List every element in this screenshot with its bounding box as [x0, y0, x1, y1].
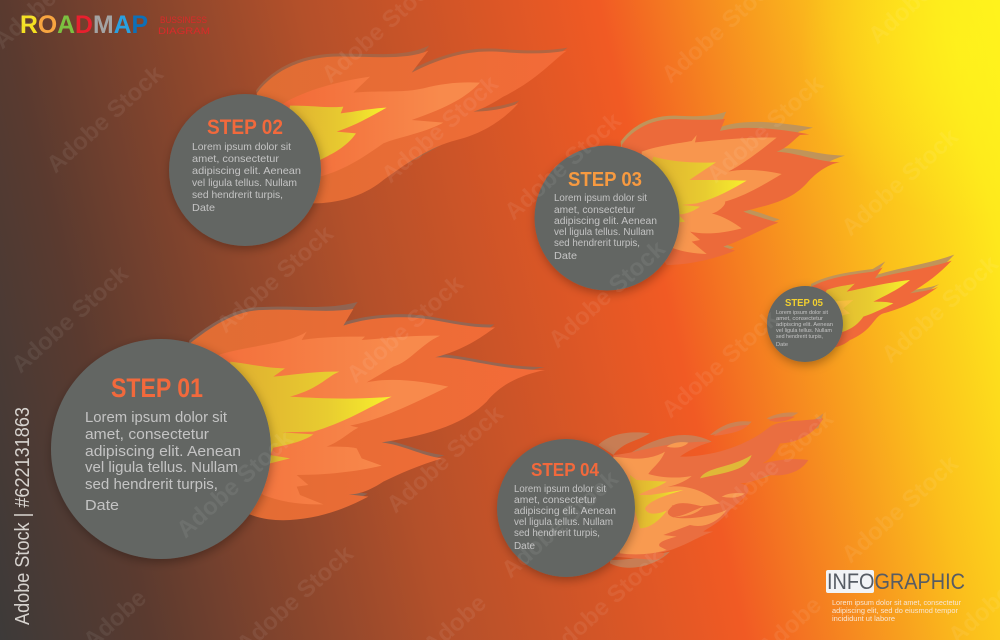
text block: step 3 body: adipiscing elit. Aenean — [554, 216, 657, 227]
flame: step 3 — [621, 112, 845, 265]
text block: step 2 body: adipiscing elit. Aenean — [192, 165, 301, 177]
flame: step 4 — [598, 412, 823, 568]
infographic label: INFOGRAPHIC — [827, 569, 965, 594]
text block: step 5 body — [776, 310, 833, 348]
panel: step 1 — [51, 339, 271, 559]
text block: step 2 body: sed hendrerit turpis, — [192, 189, 283, 201]
text block: step 2 body: Date — [192, 202, 215, 214]
text block: step 1 body: Date — [85, 497, 119, 514]
watermark: adobe stock pattern: Adobe Stock — [499, 107, 627, 226]
text block: step 1 body: vel ligula tellus. Nullam — [85, 459, 238, 476]
text block: step 2 body: vel ligula tellus. Nullam — [192, 177, 297, 189]
panel: step 3 — [534, 146, 680, 290]
text block: step 1 body: sed hendrerit turpis, — [85, 476, 218, 493]
text block: step 1 body: amet, consectetur — [85, 426, 209, 443]
watermark: adobe stock pattern: Adobe Stock — [6, 260, 134, 379]
text block: step 5 body: amet, consectetur — [776, 316, 823, 322]
text block: step 3 body: Date — [554, 251, 577, 262]
panel: step 2 — [169, 94, 321, 246]
watermark: adobe stock pattern: Adobe Stock — [41, 60, 169, 179]
text block: step 3 body: Lorem ipsum dolor sit — [554, 193, 647, 204]
text block: step 5 body: Lorem ipsum dolor sit — [776, 310, 828, 316]
panel: step 5 — [767, 286, 843, 362]
watermark: adobe stock pattern: Adobe Stock — [376, 70, 504, 189]
text block: step 1 body — [85, 409, 241, 514]
watermark: adobe stock pattern: Adobe Stock — [211, 220, 339, 339]
flame: step 1 — [179, 302, 545, 520]
text block: step 5 body: vel ligula tellus. Nullam — [776, 328, 832, 334]
text block: step 4 body: vel ligula tellus. Nullam — [514, 517, 613, 528]
text block: step 3 body — [554, 193, 657, 262]
text block: step 5 body: sed hendrerit turpis, — [776, 334, 823, 340]
text block: step 4 body: Date — [514, 541, 535, 552]
text block: infographic caption: incididunt ut labore — [832, 616, 895, 623]
text block: step 5 body: adipiscing elit. Aenean — [776, 322, 833, 328]
watermark: adobe stock pattern: Adobe Stock — [496, 465, 624, 584]
subtitle: business diagram: BUSSINESS — [160, 15, 207, 26]
text block: step 1 body: adipiscing elit. Aenean — [85, 443, 241, 460]
heading: step 05: STEP 05 — [785, 297, 823, 309]
flame: step 5 — [810, 255, 954, 348]
text block: infographic caption — [832, 600, 962, 623]
watermark: adobe stock pattern: Adobe Stock — [171, 425, 299, 544]
text block: step 2 body: Lorem ipsum dolor sit — [192, 141, 291, 153]
heading: step 04: STEP 04 — [531, 459, 600, 480]
text block: step 2 body: amet, consectetur — [192, 153, 280, 165]
text block: step 4 body — [514, 484, 616, 552]
watermark: adobe stock pattern: Adobe Stock — [341, 270, 469, 389]
watermark: adobe stock pattern: Adobe Stock — [711, 405, 839, 524]
watermark: adobe stock pattern: Adobe Stock — [381, 400, 509, 519]
text block: step 3 body: vel ligula tellus. Nullam — [554, 227, 654, 238]
text block: infographic caption: Lorem ipsum dolor sit amet, consectetur — [832, 600, 962, 607]
text block: step 1 body: Lorem ipsum dolor sit — [85, 409, 228, 426]
text block: step 4 body: adipiscing elit. Aenean — [514, 506, 616, 517]
stock id: vertical text: Adobe Stock | #622131863 — [12, 407, 34, 625]
watermark: adobe stock pattern: Adobe Stock — [701, 70, 829, 189]
heading: step 02: STEP 02 — [207, 116, 283, 139]
flame: step 2 — [256, 45, 568, 203]
text block: step 4 body: amet, consectetur — [514, 495, 597, 506]
text block: step 4 body: sed hendrerit turpis, — [514, 528, 600, 539]
watermark: adobe stock pattern: Adobe Stock — [836, 450, 964, 569]
panel: step 4 — [497, 439, 635, 577]
text block: infographic caption: adipiscing elit, sed do eiusmod tempor — [832, 608, 959, 615]
text block: step 3 body: amet, consectetur — [554, 205, 636, 216]
heading: step 01: STEP 01 — [111, 373, 203, 403]
watermark: adobe stock pattern: Adobe Stock — [876, 250, 1000, 369]
title: roadmap: ROADMAP — [20, 11, 148, 39]
heading: step 03: STEP 03 — [568, 169, 642, 191]
watermark: adobe stock pattern: Adobe Stock — [543, 235, 671, 354]
watermark: adobe stock pattern: Adobe Stock — [836, 123, 964, 242]
subtitle: business diagram: DIAGRAM — [158, 26, 210, 37]
subtitle: business diagram — [158, 15, 210, 37]
text block: step 4 body: Lorem ipsum dolor sit — [514, 484, 606, 495]
text block: step 5 body: Date — [776, 342, 788, 348]
watermark: adobe stock pattern: Adobe Stock — [656, 305, 784, 424]
text block: step 2 body — [192, 141, 301, 214]
text block: step 3 body: sed hendrerit turpis, — [554, 238, 640, 249]
